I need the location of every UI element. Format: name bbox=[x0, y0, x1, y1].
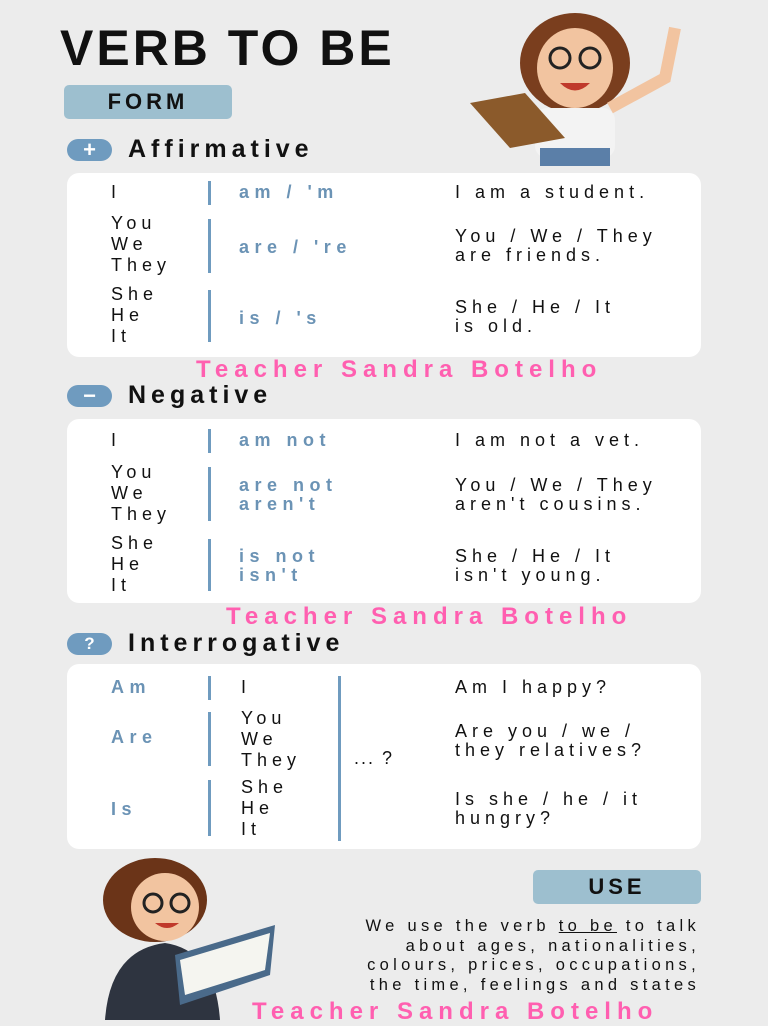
text: use description: colours, prices, occupations, bbox=[367, 956, 700, 974]
panel: interrogative: ... ? bbox=[354, 748, 394, 768]
panel: interrogative: She bbox=[241, 777, 288, 797]
panel: affirmative: She / He / It bbox=[455, 297, 615, 317]
label: use: USE bbox=[588, 874, 646, 899]
panel: negative: You bbox=[111, 462, 156, 482]
watermark: Teacher Sandra Botelho bbox=[226, 603, 632, 630]
panel: interrogative: You bbox=[241, 708, 286, 728]
panel: interrogative: They bbox=[241, 750, 301, 770]
heading: interrogative: Interrogative bbox=[128, 629, 344, 657]
panel: affirmative: am / 'm bbox=[239, 182, 339, 202]
panel: affirmative: are friends. bbox=[455, 245, 605, 265]
panel: affirmative: He bbox=[111, 305, 144, 325]
panel: interrogative: Is she / he / it bbox=[455, 789, 642, 809]
panel: negative: I bbox=[111, 430, 121, 450]
panel: negative: isn't young. bbox=[455, 565, 606, 585]
panel: affirmative: You / We / They bbox=[455, 226, 657, 246]
panel: interrogative: I bbox=[241, 677, 251, 697]
panel: negative: I am not a vet. bbox=[455, 430, 644, 450]
panel: interrogative: Are bbox=[111, 727, 158, 747]
panel: affirmative: I bbox=[111, 182, 121, 202]
panel: interrogative: hungry? bbox=[455, 808, 555, 828]
panel: negative: She bbox=[111, 533, 158, 553]
panel: affirmative: She bbox=[111, 284, 158, 304]
panel: interrogative bbox=[67, 664, 701, 849]
panel: negative: It bbox=[111, 575, 131, 595]
panel: negative: are not bbox=[239, 475, 338, 495]
panel: negative: aren't bbox=[239, 494, 320, 514]
text: use description: about ages, nationalities, bbox=[406, 936, 700, 954]
illustration: teacher bottom bbox=[103, 858, 275, 1020]
panel: affirmative: We bbox=[111, 234, 148, 254]
panel: negative: He bbox=[111, 554, 144, 574]
panel: negative: We bbox=[111, 483, 148, 503]
panel: interrogative: We bbox=[241, 729, 278, 749]
label: form: FORM bbox=[108, 89, 188, 114]
panel: negative: aren't cousins. bbox=[455, 494, 646, 514]
watermark: Teacher Sandra Botelho bbox=[196, 356, 602, 383]
panel: negative: You / We / They bbox=[455, 475, 657, 495]
text: use description bbox=[366, 917, 700, 994]
panel: interrogative: Am I happy? bbox=[455, 677, 611, 697]
panel: negative: isn't bbox=[239, 565, 303, 585]
illustration: teacher top bbox=[470, 13, 681, 166]
label: form bbox=[64, 85, 232, 119]
panel: affirmative: is old. bbox=[455, 316, 537, 336]
heading: negative: − bbox=[83, 383, 96, 408]
panel: negative: am not bbox=[239, 430, 331, 450]
panel: affirmative: I am a student. bbox=[455, 182, 649, 202]
heading: affirmative: Affirmative bbox=[128, 135, 314, 163]
panel: affirmative: It bbox=[111, 326, 131, 346]
panel: negative: They bbox=[111, 504, 171, 524]
panel: negative bbox=[67, 419, 701, 603]
panel: interrogative: Are you / we / bbox=[455, 721, 635, 741]
panel: interrogative: It bbox=[241, 819, 261, 839]
panel: affirmative: They bbox=[111, 255, 171, 275]
panel: affirmative: is / 's bbox=[239, 308, 322, 328]
text: use description: We use the verb to be to talk bbox=[366, 917, 700, 935]
heading: negative: Negative bbox=[128, 381, 272, 409]
heading: affirmative: + bbox=[83, 137, 96, 162]
panel: affirmative bbox=[67, 173, 701, 357]
panel: affirmative: You bbox=[111, 213, 156, 233]
label: use bbox=[533, 870, 701, 904]
panel: interrogative: Is bbox=[111, 799, 137, 819]
heading: interrogative: ? bbox=[84, 634, 95, 653]
panel: interrogative: He bbox=[241, 798, 274, 818]
panel: negative: She / He / It bbox=[455, 546, 615, 566]
panel: interrogative: Am bbox=[111, 677, 151, 697]
title: VERB TO BE bbox=[60, 20, 395, 76]
watermark: Teacher Sandra Botelho bbox=[252, 998, 658, 1025]
panel: negative: is not bbox=[239, 546, 320, 566]
panel: interrogative: they relatives? bbox=[455, 740, 646, 760]
text: use description: the time, feelings and states bbox=[370, 976, 700, 994]
panel: affirmative: are / 're bbox=[239, 237, 352, 257]
